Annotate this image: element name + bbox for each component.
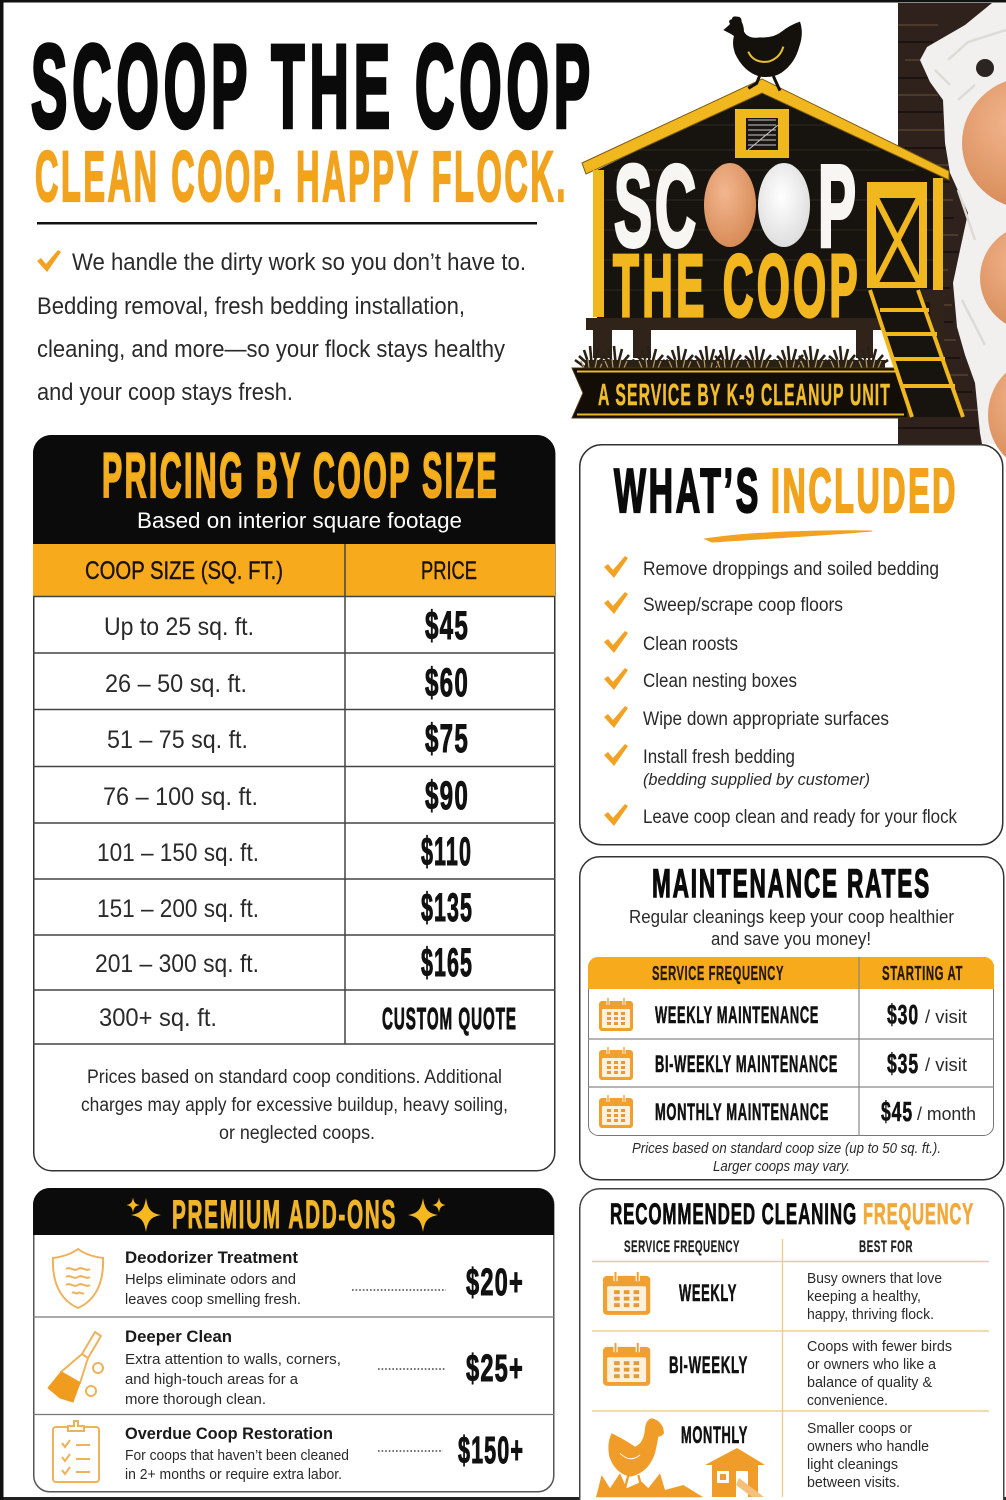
included checklist: (bedding supplied by customer) [643,770,870,789]
maintenance table: / visit [925,1007,967,1027]
row: bi-weekly: balance of quality & [807,1374,932,1391]
maintenance subtitle: and save you money! [711,929,871,949]
add-on: deeper clean [125,1327,524,1408]
maintenance table: $45 [881,1096,913,1127]
add-on: deeper clean: Deeper Clean [125,1327,232,1346]
maintenance table: SERVICE FREQUENCY [652,963,784,985]
included heading: WHAT’S [614,457,761,526]
pricing rows: 76 – 100 sq. ft. [103,783,258,811]
row: weekly [603,1270,942,1323]
maintenance table: WEEKLY MAINTENANCE [655,1002,819,1029]
table header [33,544,555,596]
maintenance table: BI-WEEKLY MAINTENANCE [655,1051,838,1078]
grass [575,346,888,368]
pricing rows: $60 [425,661,469,705]
egg carton [920,3,1006,444]
calendar icons [599,998,633,1128]
wood background with egg carton [898,3,1006,471]
pricing rows: $165 [421,941,473,985]
included checklist: Leave coop clean and ready for your flock [643,807,957,828]
intro text block: Bedding removal, fresh bedding installation, [37,293,465,320]
panel: what's included [580,445,1003,845]
icon: hen on roof [723,16,802,91]
pricing rows: 26 – 50 sq. ft. [105,670,247,698]
add-on: deeper clean: $25+ [466,1348,524,1390]
intro text block: and your coop stays fresh. [37,379,293,406]
maintenance table: / month [917,1104,976,1124]
pricing rows: $90 [425,774,469,818]
ribbon banner [572,368,908,418]
intro text block [37,249,526,406]
maintenance table: MONTHLY MAINTENANCE [655,1099,829,1126]
pricing rows: Up to 25 sq. ft. [104,613,254,641]
wall posts [593,170,604,317]
add-on: overdue restoration [125,1424,524,1483]
eggs in carton [962,77,1006,209]
add-on: overdue restoration: in 2+ months or require extra labor. [125,1466,342,1483]
pricing note: or neglected coops. [219,1123,375,1144]
maintenance table: / visit [925,1055,967,1075]
row: bi-weekly: convenience. [807,1392,888,1409]
add-on: deodorizer: $20+ [466,1262,524,1304]
roof [582,79,949,180]
included checklist: Wipe down appropriate surfaces [643,709,889,730]
panel: premium add-ons [33,1188,554,1492]
add-on: deodorizer: Helps eliminate odors and [125,1271,296,1288]
row: monthly: between visits. [807,1474,900,1491]
add-on: deeper clean: more thorough clean. [125,1391,266,1408]
included checklist: Clean roosts [643,634,738,655]
maintenance footnote: Larger coops may vary. [713,1159,850,1175]
included checklist: Install fresh bedding [643,747,795,768]
pricing rows: $75 [425,717,469,761]
panel: recommended cleaning frequency: BEST FOR [859,1237,913,1256]
window [735,109,789,158]
panel: pricing by coop size: CUSTOM QUOTE [382,1001,517,1036]
maintenance footnote [632,1141,941,1175]
row: monthly [596,1418,929,1497]
ramp [868,288,965,417]
included checklist: Sweep/scrape coop floors [643,595,843,616]
logo: coop house: SC [614,141,699,271]
maintenance footnote: Prices based on standard coop size (up to 50 sq. ft.). [632,1141,941,1157]
pricing rows: $45 [425,604,469,648]
maintenance table [588,957,994,1136]
maintenance table: $35 [887,1048,919,1079]
row: bi-weekly [603,1338,952,1409]
add-on: deodorizer: leaves coop smelling fresh. [125,1291,301,1308]
add-on: overdue restoration: Overdue Coop Restoration [125,1424,333,1443]
pricing rows: 201 – 300 sq. ft. [95,950,259,978]
row: weekly: keeping a healthy, [807,1288,921,1305]
pricing note [81,1067,508,1144]
pricing rows: 151 – 200 sq. ft. [97,895,259,923]
panel: maintenance rates [580,857,1004,1180]
maintenance table: $30 [887,999,919,1030]
pricing rows: 300+ sq. ft. [99,1004,217,1032]
row: bi-weekly: Coops with fewer birds [807,1338,952,1355]
row: weekly: happy, thriving flock. [807,1306,934,1323]
row: monthly: MONTHLY [681,1422,748,1449]
door [867,182,927,288]
white egg [758,163,810,247]
panel: pricing by coop size [33,435,555,1171]
panel: recommended cleaning frequency [580,1189,1004,1500]
pricing rows [95,604,517,1036]
intro text block: cleaning, and more—so your flock stays healthy [37,336,505,363]
row: monthly: owners who handle [807,1438,929,1455]
row: bi-weekly: BI-WEEKLY [669,1352,748,1379]
add-on: deodorizer [125,1248,524,1308]
icon: orange coop [705,1448,765,1497]
row: bi-weekly: or owners who like a [807,1356,937,1373]
table header: PRICE [421,557,477,585]
logo: coop house [572,16,965,418]
icon: broom [48,1332,103,1402]
add-on: deodorizer: Deodorizer Treatment [125,1248,298,1267]
add-on: overdue restoration: For coops that haven’t been cleaned [125,1447,349,1464]
row: monthly: Smaller coops or [807,1420,912,1437]
included checklist: Clean nesting boxes [643,671,797,692]
brown egg [704,163,756,247]
pricing header [33,435,555,544]
add-ons header: PREMIUM ADD-ONS [172,1193,397,1237]
add-ons header [33,1188,554,1237]
pricing rows: 51 – 75 sq. ft. [107,726,248,754]
coop wall [597,90,940,318]
icon: shield [53,1249,103,1308]
pricing rows: $135 [421,886,473,930]
row: monthly: light cleanings [807,1456,898,1473]
pricing rows: 101 – 150 sq. ft. [97,839,259,867]
pricing note: charges may apply for excessive buildup, heavy soiling, [81,1095,508,1116]
panel: recommended cleaning frequency: SERVICE FREQUENCY [624,1237,740,1256]
pricing header: PRICING BY COOP SIZE [102,441,499,511]
icon: clipboard [53,1421,99,1482]
add-on: deeper clean: and high-touch areas for a [125,1371,299,1388]
intro text block: We handle the dirty work so you don’t have to. [72,249,526,276]
row: weekly: WEEKLY [679,1280,737,1307]
pricing rows: $110 [421,830,472,874]
logo: coop house: P [818,141,856,271]
maintenance subtitle: Regular cleanings keep your coop healthier [629,907,954,927]
icon: intro check [37,250,61,272]
pricing subtitle: Based on interior square footage [137,508,462,533]
add-on: overdue restoration: $150+ [458,1430,524,1472]
row: weekly: Busy owners that love [807,1270,942,1287]
included checklist [604,556,957,828]
floor beam and legs [586,290,945,358]
included checklist: Remove droppings and soiled bedding [643,559,939,580]
table header: COOP SIZE (SQ. FT.) [85,557,283,585]
maintenance subtitle [629,907,954,949]
icon: orange hen [596,1418,703,1497]
pricing note: Prices based on standard coop conditions. Additional [87,1067,502,1088]
add-on: deeper clean: Extra attention to walls, corners, [125,1351,341,1368]
